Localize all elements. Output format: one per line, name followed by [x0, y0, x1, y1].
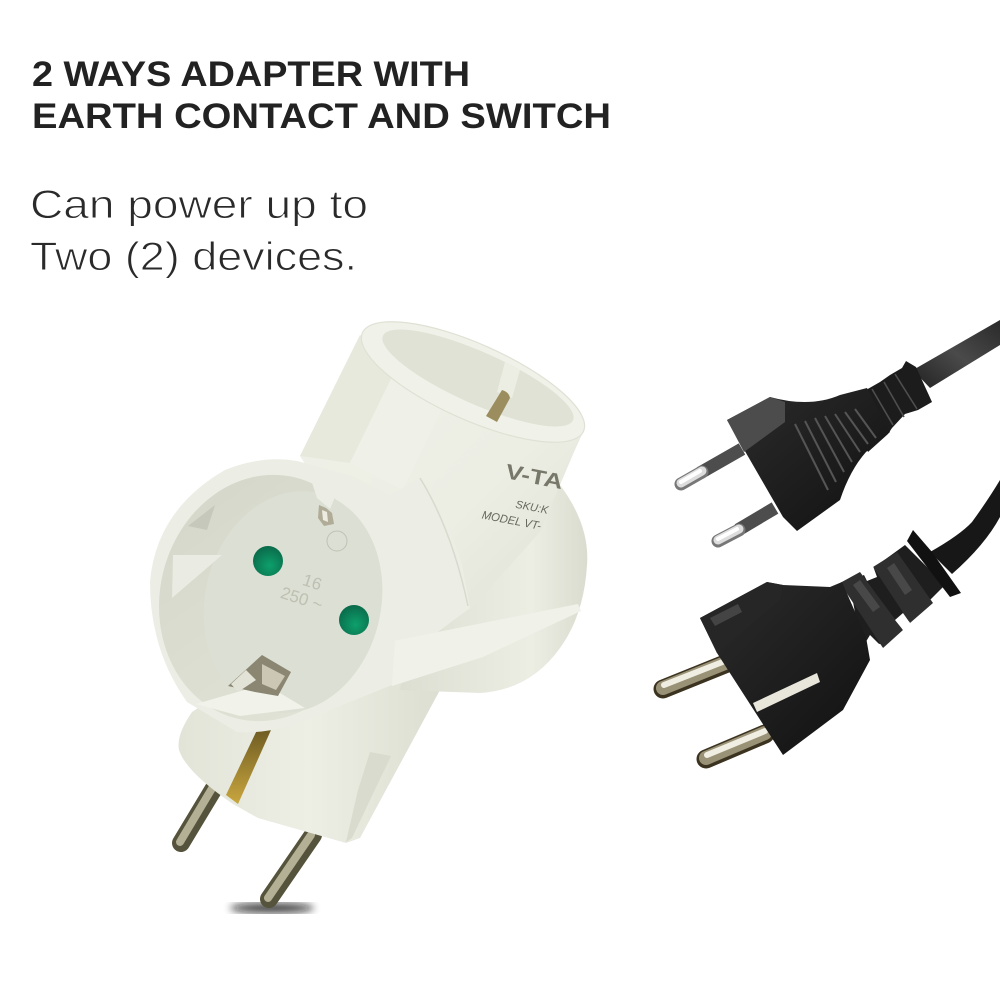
title: EARTH CONTACT AND SWITCH	[32, 96, 611, 136]
plug pins	[180, 775, 313, 899]
plug body	[179, 640, 440, 843]
plug body	[727, 388, 890, 531]
front socket floor	[182, 473, 404, 731]
rear cylinder	[400, 470, 587, 693]
ground symbol	[327, 531, 347, 551]
subtitle: Can power up to	[30, 183, 368, 227]
logo text: SKU:K	[514, 499, 550, 517]
pins	[681, 449, 775, 541]
top socket rib	[497, 362, 520, 398]
rating text: 16	[300, 570, 324, 594]
top rim notch	[307, 467, 338, 509]
relief notches	[862, 566, 910, 658]
logo text: MODEL VT-	[481, 510, 542, 533]
socket guide ribs	[172, 555, 222, 598]
shadow under adapter	[230, 903, 314, 913]
green contact holes	[253, 546, 369, 635]
bottom rim lip	[196, 684, 305, 716]
top socket pin	[486, 390, 510, 422]
subtitle	[30, 183, 368, 279]
front socket band	[330, 478, 470, 700]
grip ribs	[795, 409, 876, 490]
flange	[907, 530, 961, 597]
two-pin plug	[681, 320, 1000, 541]
front socket outer rim	[150, 459, 407, 732]
relief discs	[840, 552, 933, 648]
barrel shaded left	[300, 335, 393, 463]
relief ribs	[872, 374, 917, 425]
plug notch	[346, 752, 391, 842]
top socket rim	[347, 298, 599, 466]
earthed plug	[663, 480, 1000, 759]
top earth clip	[318, 505, 334, 526]
logo text: V-TA	[504, 460, 565, 494]
top socket barrel	[300, 335, 584, 610]
plug body	[700, 582, 870, 755]
cord	[913, 320, 1000, 388]
front socket wall	[135, 453, 397, 743]
cord	[930, 480, 1000, 574]
rating text: 250 ~	[278, 583, 325, 615]
top facet	[700, 582, 783, 653]
face plate facet	[727, 397, 785, 452]
brass earth strip	[226, 728, 271, 804]
rating text	[278, 565, 331, 615]
title	[32, 54, 611, 136]
earth contact bar	[753, 673, 820, 712]
title: 2 WAYS ADAPTER WITH	[32, 54, 470, 94]
pins	[663, 661, 765, 759]
top socket opening	[372, 312, 584, 444]
logo text	[481, 458, 565, 535]
strain relief	[850, 361, 932, 452]
bottom earth clip	[228, 655, 291, 696]
subtitle: Two (2) devices.	[30, 235, 357, 279]
strain relief core	[850, 545, 945, 645]
adapter product photo	[135, 298, 599, 913]
relief texture	[853, 563, 912, 612]
barrel band	[350, 375, 443, 490]
